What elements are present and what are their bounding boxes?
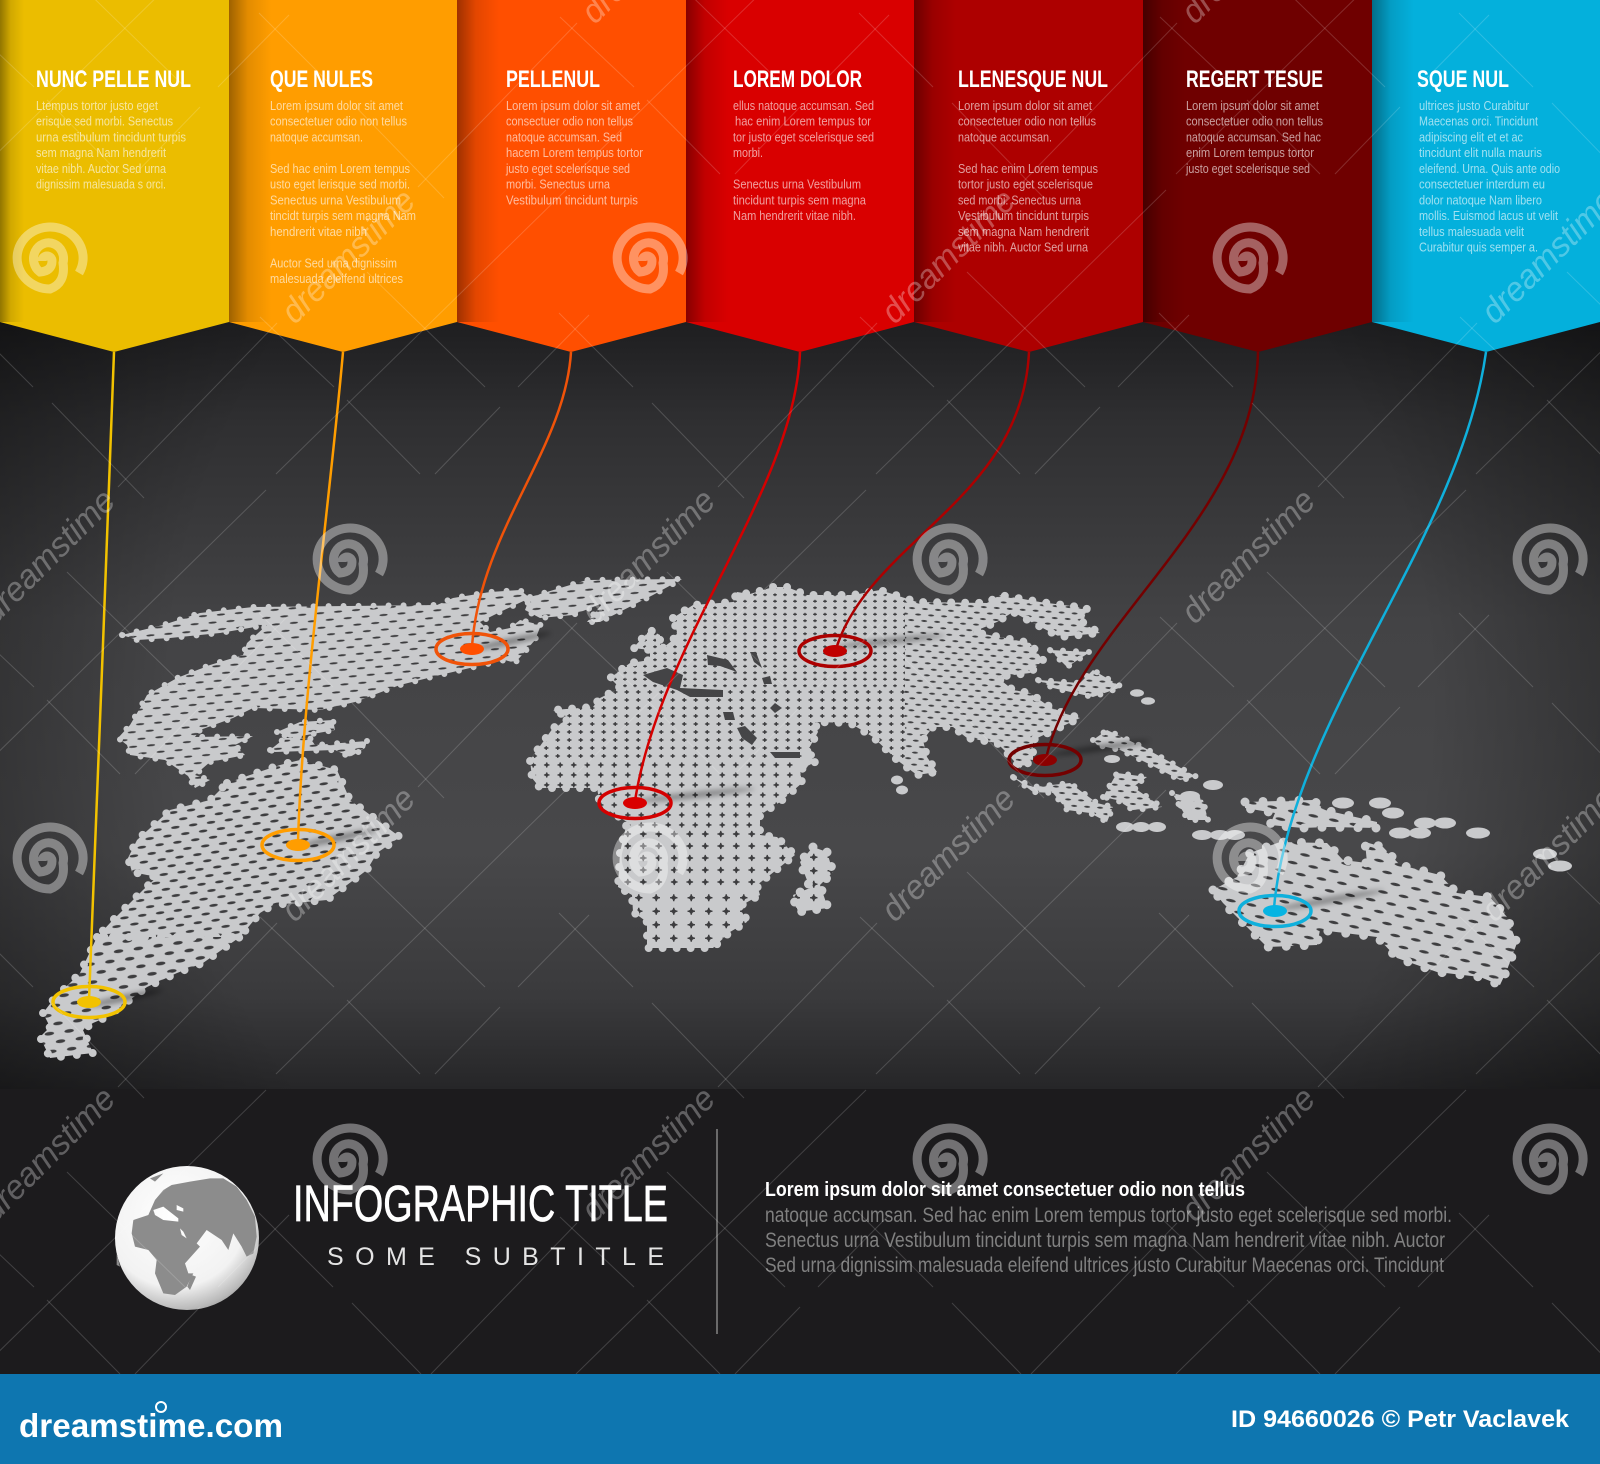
body text: Lorem ipsum dolor sit amet	[270, 98, 403, 113]
subtitle: SOME SUBTITLE	[327, 1243, 664, 1271]
banner 1: yellow	[0, 0, 229, 352]
body text: Sed hac enim Lorem tempus	[270, 161, 410, 176]
body text: enim Lorem tempus tortor	[1186, 145, 1315, 160]
body text	[733, 98, 874, 223]
watermark overlay: dreamstime	[574, 1080, 723, 1229]
marker 7: blue	[1239, 352, 1486, 926]
body text: malesuada eleifend ultrices	[270, 271, 403, 286]
panel: blue credit bar	[0, 1374, 1600, 1464]
icon: logo spiral	[156, 1402, 166, 1412]
body text: Vestibulum tincidunt turpis	[506, 192, 638, 207]
body text: vitae nibh. Auctor Sed urna	[36, 161, 167, 176]
body text: tor justo eget scelerisque sed	[733, 130, 874, 144]
body text: ultrices justo Curabitur	[1419, 98, 1530, 113]
body text: eleifend. Urna. Quis ante odio	[1419, 161, 1560, 176]
heading: LLENESQUE NUL	[958, 66, 1108, 93]
Europe, Asia and Africa	[526, 583, 1100, 952]
description text: Lorem ipsum dolor sit amet consectetuer odio non tellus	[765, 1179, 1245, 1201]
body text: consectetuer interdum eu	[1419, 177, 1545, 192]
description text: Sed urna dignissim malesuada eleifend ultrices justo Curabitur Maecenas orci. Tincidunt	[765, 1254, 1444, 1277]
body text: natoque accumsan. Sed	[506, 130, 622, 144]
Australia and New Guinea	[1213, 800, 1517, 985]
watermark overlay: dreamstime	[874, 182, 1023, 331]
body text: consectetuer odio non tellus	[1186, 114, 1323, 129]
panel: coloured header banners	[0, 0, 1600, 352]
body text: Ltempus tortor justo eget	[36, 98, 158, 113]
body text: Senectus urna Vestibulum	[270, 192, 401, 207]
body text: tortor justo eget scelerisque	[958, 177, 1093, 192]
banner 4: red	[686, 0, 914, 352]
body text: tincidunt turpis sem magna	[733, 192, 867, 207]
marker 6: dark red	[1009, 352, 1258, 776]
body text: dolor natoque Nam libero	[1419, 192, 1542, 207]
body text: natoque accumsan.	[270, 130, 363, 144]
body text: Vestibulum tincidunt turpis	[958, 208, 1089, 223]
banner 6: dark red	[1143, 0, 1372, 352]
body text: consectuer odio non tellus	[506, 114, 633, 129]
body text	[36, 98, 186, 192]
North America	[118, 579, 682, 788]
body text: mollis. Euismod lacus ut velit	[1419, 208, 1558, 223]
body text: hacem Lorem tempus tortor	[506, 145, 644, 160]
banner 7: blue	[1372, 0, 1600, 352]
body text: sem magna Nam hendrerit	[958, 224, 1089, 239]
brand logo text: dreamstime.com	[19, 1407, 283, 1444]
body text: natoque accumsan. Sed hac	[1186, 130, 1321, 144]
body text: usto eget lerisque sed morbi.	[270, 177, 410, 192]
body text: morbi.	[733, 145, 763, 160]
watermark overlay: dreamstime	[1174, 1080, 1323, 1229]
vertical divider	[716, 1129, 718, 1334]
watermark overlay: dreamstime	[1174, 482, 1323, 631]
connector lines with location markers	[53, 352, 1486, 1018]
body text: natoque accumsan.	[958, 130, 1052, 144]
scattered island dots	[798, 689, 1572, 872]
South America	[40, 760, 400, 1058]
body text: morbi. Senectus urna	[506, 177, 611, 192]
description text: Senectus urna Vestibulum tincidunt turpis sem magna Nam hendrerit vitae nibh. Auctor	[765, 1229, 1445, 1252]
watermark overlay: dreamstime	[874, 780, 1023, 929]
image credit: ID 94660026 © Petr Vaclavek	[1231, 1406, 1570, 1433]
heading: LOREM DOLOR	[733, 66, 862, 93]
banner 2: orange	[229, 0, 457, 352]
body text: Lorem ipsum dolor sit amet	[1186, 98, 1319, 113]
body text: Sed hac enim Lorem tempus	[958, 161, 1098, 176]
marker 4: red	[599, 352, 800, 818]
marker 3: deep orange	[436, 352, 571, 664]
body text: tincidt turpis sem magna Nam	[270, 208, 416, 223]
marker 2: orange	[262, 352, 378, 860]
body text: Auctor Sed urna dignissim	[270, 255, 397, 270]
body text: Curabitur quis semper a.	[1419, 240, 1538, 255]
banner 3: deep orange	[457, 0, 686, 352]
watermark overlay: dreamstime	[274, 780, 423, 929]
heading: PELLENUL	[506, 66, 600, 93]
body text: sem magna Nam hendrerit	[36, 145, 166, 160]
dotted world map	[40, 570, 1572, 1058]
heading: SQUE NUL	[1417, 66, 1509, 93]
body text: sed morbi. Senectus urna	[958, 192, 1082, 207]
body text	[958, 98, 1098, 255]
body text: tincidunt elit nulla mauris	[1419, 145, 1542, 160]
body text: hendrerit vitae nibh	[270, 224, 367, 239]
icon: globe	[115, 1166, 259, 1310]
heading: QUE NULES	[270, 66, 373, 93]
body text: vitae nibh. Auctor Sed urna	[958, 240, 1089, 255]
body text: justo eget scelerisque sed	[1185, 161, 1310, 176]
body text: Lorem ipsum dolor sit amet	[506, 98, 640, 113]
body text: dignissim malesuada s orci.	[36, 177, 166, 192]
body text	[270, 98, 416, 286]
panel: dark footer strip	[0, 1089, 1600, 1374]
body text: adipiscing elit et et ac	[1419, 130, 1523, 144]
title: INFOGRAPHIC TITLE	[293, 1175, 668, 1232]
body text: hac enim Lorem tempus tor	[735, 114, 872, 129]
body text: Maecenas orci. Tincidunt	[1419, 114, 1538, 129]
body text: urna estibulum tincidunt turpis	[36, 130, 186, 144]
watermark overlay: dreamstime	[274, 182, 423, 331]
body text: Lorem ipsum dolor sit amet	[958, 98, 1092, 113]
marker 5: crimson	[799, 352, 1029, 666]
heading: REGERT TESUE	[1186, 66, 1323, 93]
body text: erisque sed morbi. Senectus	[36, 114, 173, 129]
heading: NUNC PELLE NUL	[36, 66, 191, 93]
watermark overlay: dreamstime	[574, 482, 723, 631]
body text: consectetuer odio non tellus	[270, 114, 407, 129]
dark map background	[0, 300, 1600, 1089]
body text: ellus natoque accumsan. Sed	[733, 98, 874, 113]
marker 1: yellow	[53, 352, 163, 1018]
body text	[1419, 98, 1560, 255]
body text	[1185, 98, 1323, 176]
description text	[765, 1179, 1452, 1277]
body text: Senectus urna Vestibulum	[733, 177, 861, 192]
body text: consectetuer odio non tellus	[958, 114, 1096, 129]
East Asia and Indonesia islands	[1013, 650, 1208, 822]
body text: justo eget scelerisque sed	[505, 161, 630, 176]
description text: natoque accumsan. Sed hac enim Lorem tempus tortor justo eget scelerisque sed morbi.	[765, 1204, 1452, 1227]
body text: Nam hendrerit vitae nibh.	[733, 208, 856, 223]
banner 5: crimson	[914, 0, 1143, 352]
body text	[505, 98, 644, 207]
body text: tellus malesuada velit	[1419, 224, 1524, 239]
Madagascar	[793, 847, 833, 912]
